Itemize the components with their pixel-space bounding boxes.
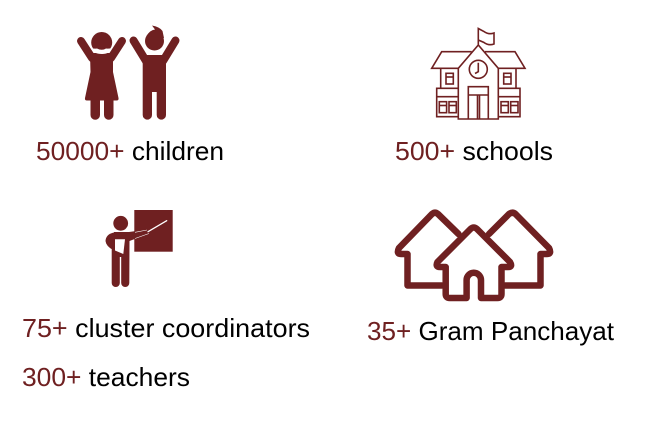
label: Gram Panchayat: 35+ Gram Panchayat	[367, 316, 615, 346]
label: cluster coordinators: 75+ cluster coordinators	[22, 313, 310, 343]
icon: school	[432, 28, 525, 119]
icon: houses	[398, 213, 550, 298]
icon: teacher at board	[106, 210, 173, 287]
label: children: 50000+ children	[36, 136, 224, 166]
label: schools: 500+ schools	[395, 136, 553, 166]
label: teachers: 300+ teachers	[22, 362, 190, 392]
icon: children	[81, 26, 176, 120]
